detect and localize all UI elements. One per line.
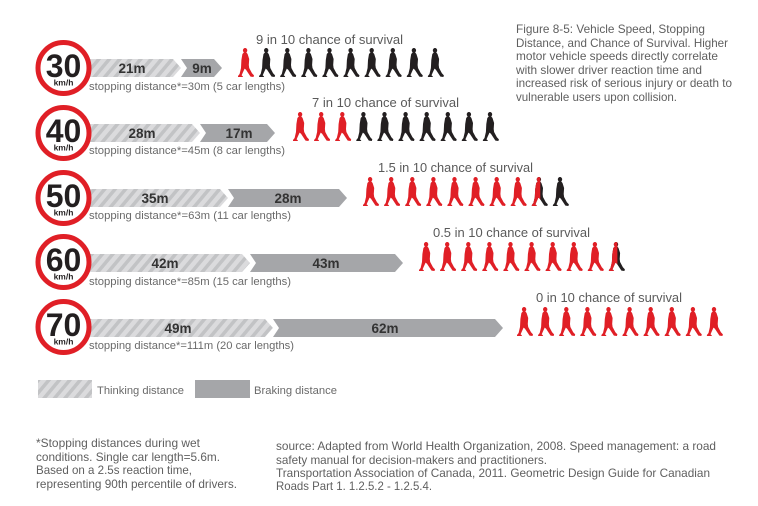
source note: safety manual for decision-makers and practitioners. (276, 453, 547, 467)
speed sign 70: km/h (54, 336, 73, 346)
legend label: braking distance: Braking distance (254, 385, 337, 397)
thinking distance bar 49m (88, 319, 273, 337)
row: 70 km/h (38, 291, 723, 352)
figure description: motor vehicle speeds directly correlate (516, 49, 718, 63)
speed sign 40: 40 (46, 113, 81, 149)
thinking distance bar 42m: 42m (151, 256, 179, 271)
speed sign 40 (38, 108, 89, 158)
stopping distance label: stopping distance*=85m (15 car lengths) (89, 276, 291, 288)
legend swatch: braking distance (195, 380, 250, 398)
braking distance bar 62m: 62m (371, 321, 399, 336)
speed sign 30: 30 (46, 48, 81, 84)
stopping distance label: stopping distance*=30m (5 car lengths) (89, 81, 285, 93)
footnote: representing 90th percentile of drivers. (36, 477, 237, 491)
walkers: 9.5 red, half black (419, 242, 625, 271)
row: 60 km/h (38, 226, 625, 288)
speed sign 70 (38, 302, 89, 352)
row: 40 km/h (38, 96, 499, 158)
braking distance bar 43m: 43m (312, 256, 340, 271)
speed sign 30 (38, 42, 89, 94)
survival label: 1.5 in 10 chance of survival (378, 161, 533, 175)
speed sign 50: 50 (46, 178, 81, 214)
walkers: 8.5 red, 1.5 black (363, 177, 569, 206)
survival label: 0.5 in 10 chance of survival (433, 226, 590, 240)
footnote: *Stopping distances during wet (36, 436, 201, 450)
speed sign 50 (38, 172, 89, 224)
thinking distance bar 28m: 28m (128, 126, 156, 141)
figure description: Distance, and Chance of Survival. Higher (516, 36, 728, 50)
thinking distance bar 49m: 49m (164, 321, 192, 336)
row: 30 km/h (38, 33, 444, 94)
speed sign 50: km/h (54, 208, 73, 218)
footnote: Based on a 2.5s reaction time, (36, 463, 192, 477)
thinking distance bar 42m (88, 254, 250, 272)
thinking distance bar 35m: 35m (141, 191, 169, 206)
legend swatch: thinking distance (38, 380, 92, 398)
stopping distance label: stopping distance*=63m (11 car lengths) (89, 210, 291, 222)
walkers: 1 red, 9 black (238, 48, 444, 77)
survival label: 7 in 10 chance of survival (312, 96, 459, 110)
speed sign 30: km/h (54, 78, 73, 88)
survival label: 0 in 10 chance of survival (536, 291, 682, 305)
thinking distance bar 21m: 21m (118, 61, 146, 76)
source note: Transportation Association of Canada, 2011. Geometric Design Guide for Canadian (276, 466, 710, 480)
footnote (36, 436, 237, 491)
figure description: increased risk of serious injury or death to (516, 76, 732, 90)
speed sign 40: km/h (54, 142, 73, 152)
footnote: conditions. Single car length=5.6m. (36, 450, 220, 464)
thinking distance bar 35m (88, 189, 228, 207)
thinking distance bar 28m (88, 124, 200, 142)
row: 50 km/h (38, 161, 569, 224)
walkers: 3 red, 7 black (293, 112, 499, 141)
legend (38, 380, 337, 398)
braking distance bar 43m (250, 254, 403, 272)
walkers: 10 red (517, 307, 723, 336)
stopping distance label: stopping distance*=45m (8 car lengths) (89, 145, 285, 157)
survival label: 9 in 10 chance of survival (256, 33, 403, 47)
speed sign 60: 60 (46, 242, 81, 278)
source note (276, 439, 716, 493)
legend label: thinking distance: Thinking distance (97, 385, 184, 397)
braking distance bar 9m: 9m (192, 61, 212, 76)
figure description: vulnerable users upon collision. (516, 90, 677, 104)
braking distance bar 9m (181, 59, 222, 77)
braking distance bar 28m: 28m (274, 191, 302, 206)
stopping distance label: stopping distance*=111m (20 car lengths) (89, 340, 294, 352)
thinking distance bar 21m (88, 59, 181, 77)
source note: Roads Part 1. 1.2.5.2 - 1.2.5.4. (276, 479, 432, 493)
speed sign 70: 70 (46, 307, 81, 343)
braking distance bar 17m: 17m (225, 126, 253, 141)
figure description: Figure 8-5: Vehicle Speed, Stopping (516, 22, 705, 36)
braking distance bar 62m (273, 319, 503, 337)
figure description: with slower driver reaction time and (515, 63, 702, 77)
speed sign 60 (38, 236, 89, 288)
figure description (515, 22, 732, 104)
braking distance bar 17m (200, 124, 275, 142)
braking distance bar 28m (228, 189, 347, 207)
source note: source: Adapted from World Health Organization, 2008. Speed management: a road (276, 439, 716, 453)
speed sign 60: km/h (54, 272, 73, 282)
